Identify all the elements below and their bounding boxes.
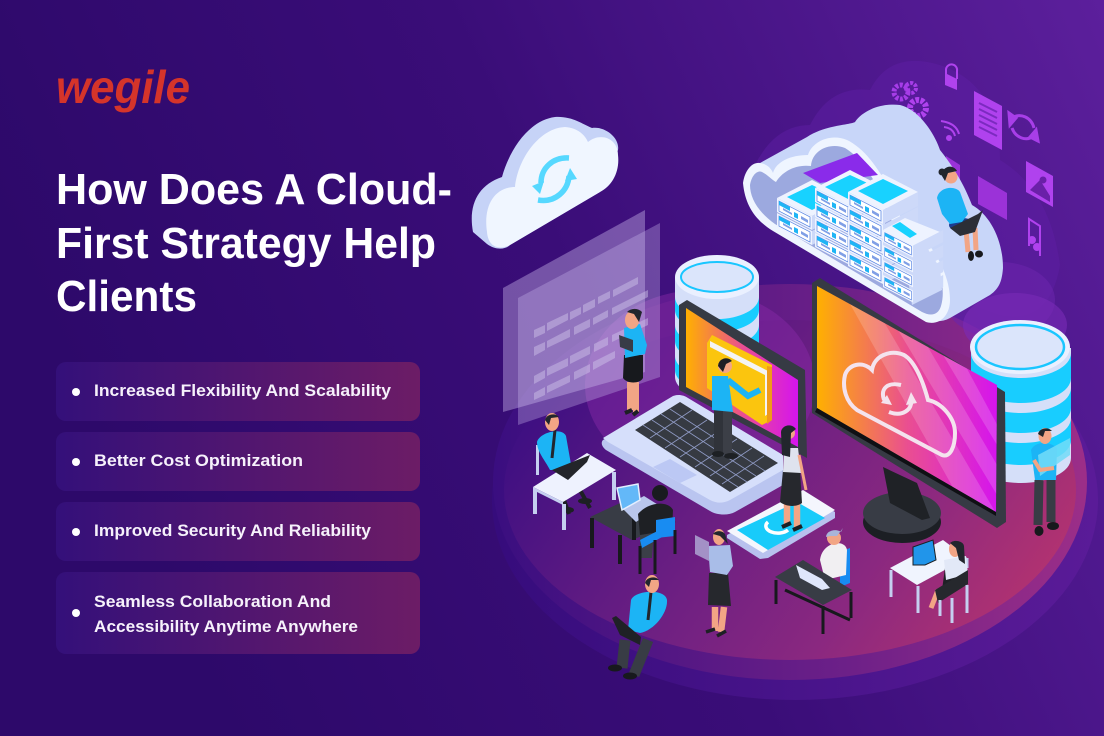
- icon: gears: [894, 83, 926, 116]
- keyboard: [635, 402, 778, 492]
- cloud sync icon on screen: [844, 353, 955, 455]
- benefit: flexibility: Increased Flexibility And Scalability: [94, 381, 392, 400]
- cloud body side: [760, 105, 1003, 321]
- monitor frame: [812, 278, 1006, 528]
- man at dark desk with laptop: [590, 484, 676, 574]
- icon: document: [974, 91, 1002, 150]
- benefit: collaboration: Accessibility Anytime Anywhere: [94, 617, 358, 636]
- woman with glass tablet: [695, 529, 733, 636]
- benefit: cost: [56, 432, 420, 491]
- desktop monitor: [812, 278, 1006, 543]
- cloud rim: [743, 138, 950, 323]
- benefit: security: [56, 502, 420, 561]
- woman at white desk: [890, 540, 968, 623]
- trackpad: [653, 459, 697, 483]
- older woman at dark desk: [775, 528, 852, 634]
- company logo: wegile: [56, 61, 190, 113]
- yellow folder: [707, 335, 772, 425]
- man holding glass tablet: [1031, 428, 1070, 536]
- translucent code panels: [503, 210, 660, 425]
- left database cylinder: [675, 255, 759, 399]
- benefit: flexibility: [56, 362, 420, 421]
- title: Clients: [56, 272, 197, 321]
- icon: sync arrows: [532, 158, 577, 200]
- benefit: cost: Better Cost Optimization: [94, 451, 303, 470]
- icon: image: [1026, 161, 1053, 207]
- cloud interior: [750, 146, 943, 314]
- benefit: collaboration: [56, 572, 420, 654]
- title: [56, 165, 452, 321]
- icon: music note: [1029, 219, 1040, 256]
- man with laptop on lap: [608, 575, 667, 680]
- purple gap: [803, 153, 878, 183]
- benefits list: [56, 362, 420, 654]
- phone sync icon: [766, 522, 788, 533]
- title: First Strategy Help: [56, 219, 436, 268]
- panel text bars: [534, 277, 648, 400]
- benefit: security: Improved Security And Reliability: [94, 521, 372, 540]
- man at white desk: [533, 413, 616, 530]
- circular isometric platform: [492, 284, 1098, 700]
- woman holding folder: [619, 309, 647, 415]
- laptop screen: [679, 300, 807, 458]
- woman on cloud with laptop: [937, 167, 983, 261]
- benefit: collaboration: Seamless Collaboration And: [94, 592, 331, 611]
- icon: sync: [1009, 113, 1038, 141]
- icon: wifi: [941, 121, 959, 140]
- laptop: [602, 300, 807, 515]
- icon: folder: [946, 156, 1007, 220]
- monitor stand: [863, 501, 941, 543]
- floating icons: [894, 64, 1053, 256]
- title: How Does A Cloud-: [56, 165, 452, 214]
- background glow clouds: [755, 61, 1067, 357]
- phone: [727, 490, 835, 559]
- man pointing on laptop: [712, 358, 760, 459]
- large cloud with servers: [743, 105, 1003, 323]
- right database cylinder: [970, 320, 1071, 483]
- icon: padlock: [945, 64, 957, 90]
- server racks: [777, 170, 943, 303]
- laptop base: [602, 395, 783, 515]
- inner cloud wall: [900, 226, 942, 305]
- small cloud with sync icon: [472, 117, 618, 249]
- woman standing by phone: [780, 425, 806, 530]
